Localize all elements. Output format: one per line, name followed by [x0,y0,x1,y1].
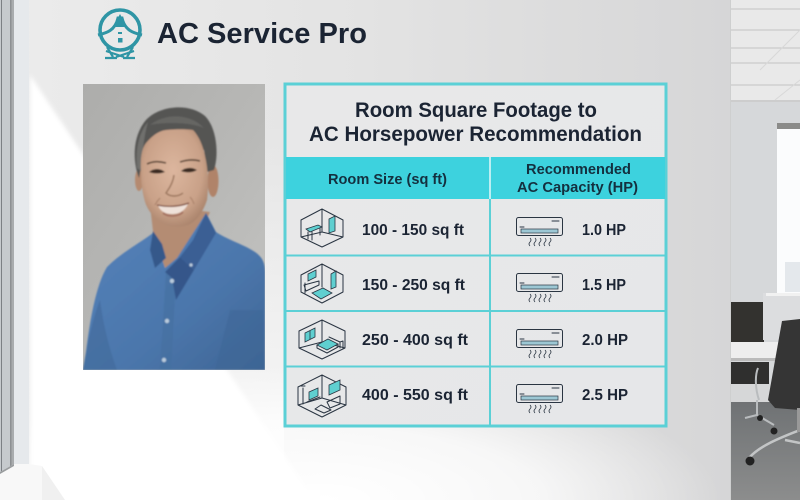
row: 250-400 sq ft: 250 - 400 sq ft [362,332,468,349]
face [141,129,208,227]
table header band [286,157,665,199]
shirt [83,213,265,370]
ears [135,169,143,191]
row: 1.5 HP [516,274,626,302]
smile [158,204,188,214]
row: 1.0 HP [516,218,626,246]
row: 100-150 sq ft [301,209,464,247]
row: 1.5 HP: 1.5 HP [582,277,626,294]
nose [166,175,183,196]
hair [135,107,217,178]
heading: AC Horsepower Recommendation [309,123,642,146]
row: 400-550 sq ft: 400 - 550 sq ft [362,387,468,404]
icon: logo emblem [98,10,142,58]
row: 150-250 sq ft [301,264,465,303]
ceiling [731,0,800,102]
table header band: AC Capacity (HP) [517,180,638,196]
icon: bedroom [299,320,345,359]
row: 2.5 HP [516,384,628,413]
desk, monitor and chairs [731,293,800,500]
row: 100-150 sq ft: 100 - 150 sq ft [362,222,464,239]
right office view [731,0,800,500]
table header band: Recommended [526,162,631,178]
row: 150-250 sq ft: 150 - 250 sq ft [362,277,465,294]
heading [309,99,642,146]
row: 250-400 sq ft [299,320,468,359]
icon: air conditioner [516,274,562,302]
eyes [149,169,165,174]
panel: horsepower table [285,84,666,426]
row: 400-550 sq ft [298,375,468,417]
icon: air conditioner [516,384,562,413]
left window [0,0,65,500]
neck [150,210,210,268]
icon: small room with desk [301,209,343,247]
icon: air conditioner [516,218,562,246]
portrait photo [83,84,265,370]
shirt buttons [170,279,174,283]
icon: room with rug and sofa [301,264,343,303]
back window [777,123,800,293]
table header band: Room Size (sq ft) [328,172,447,188]
brand name: AC Service Pro [157,18,367,50]
heading: Room Square Footage to [355,99,597,122]
row: 1.0 HP: 1.0 HP [582,222,626,239]
icon: living room [298,375,346,417]
row: 2.5 HP: 2.5 HP [582,387,628,404]
row: 2.0 HP: 2.0 HP [582,332,628,349]
row: 2.0 HP [516,330,628,358]
icon: air conditioner [516,330,562,358]
collar [150,231,166,268]
logo: AC Service Pro [98,10,367,58]
